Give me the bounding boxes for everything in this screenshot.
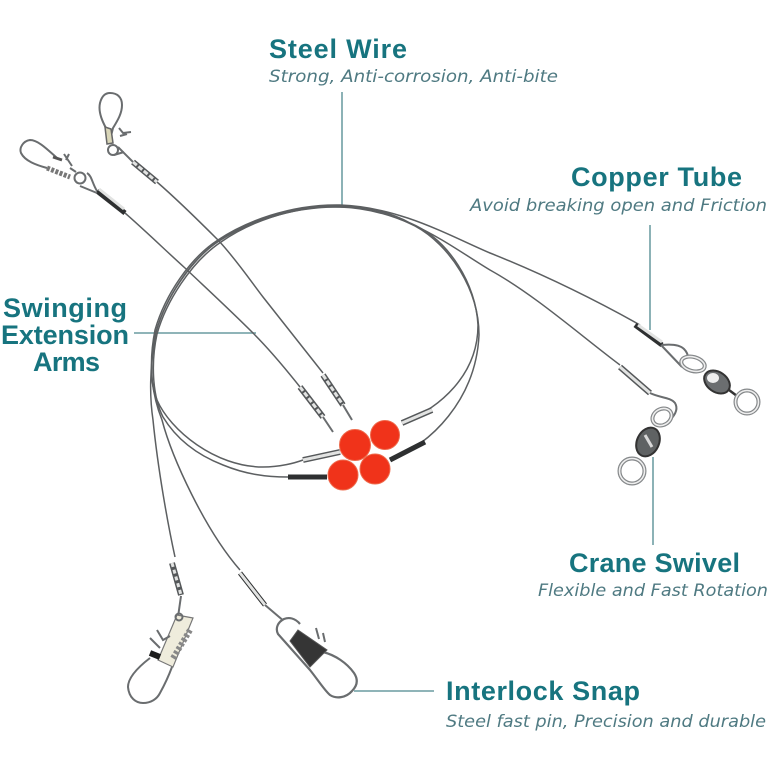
- icon: upper-left snap 1: [99, 93, 133, 162]
- icon: upper-left snap 2: [20, 140, 97, 193]
- icon: right swivel upper: [661, 345, 758, 414]
- metal tubes: [97, 162, 662, 605]
- heading: Steel Wire: Steel Wire: [269, 34, 407, 64]
- icon: lower left snap: [128, 596, 193, 703]
- heading: Interlock Snap: Interlock Snap: [446, 676, 640, 706]
- icon: right swivel lower: [620, 393, 676, 484]
- subtitle: Crane Swivel: Flexible and Fast Rotation: [538, 581, 768, 600]
- heading: Interlock Snap: [446, 676, 766, 731]
- leader line: copper tube: [649, 225, 651, 330]
- subtitle: Interlock Snap: Steel fast pin, Precision and durable: [446, 712, 766, 731]
- heading: Swinging Extension Arms: Swinging: [3, 293, 127, 323]
- subtitle: Steel Wire: Strong, Anti-corrosion, Anti-bite: [269, 67, 558, 86]
- icon: lower right snap: [265, 605, 357, 697]
- heading: Crane Swivel: [538, 548, 768, 600]
- subtitle: Copper Tube: Avoid breaking open and Friction: [469, 196, 767, 215]
- heading: Swinging Extension Arms: [1, 293, 129, 377]
- heading: Copper Tube: Copper Tube: [571, 162, 742, 192]
- leader line: interlock snap: [354, 690, 434, 692]
- wire loops: [151, 205, 640, 570]
- red beads: [328, 420, 400, 490]
- leader line: crane swivel: [652, 457, 654, 545]
- heading: Steel Wire: [269, 34, 558, 86]
- leader line: swinging arms: [134, 332, 256, 334]
- heading: Crane Swivel: Crane Swivel: [569, 548, 740, 578]
- heading: Copper Tube: [469, 162, 767, 215]
- heading: Swinging Extension Arms: Arms: [33, 347, 100, 377]
- upper arms: [125, 182, 323, 387]
- leader line: steel wire: [341, 92, 343, 205]
- heading: Swinging Extension Arms: Extension: [1, 320, 129, 350]
